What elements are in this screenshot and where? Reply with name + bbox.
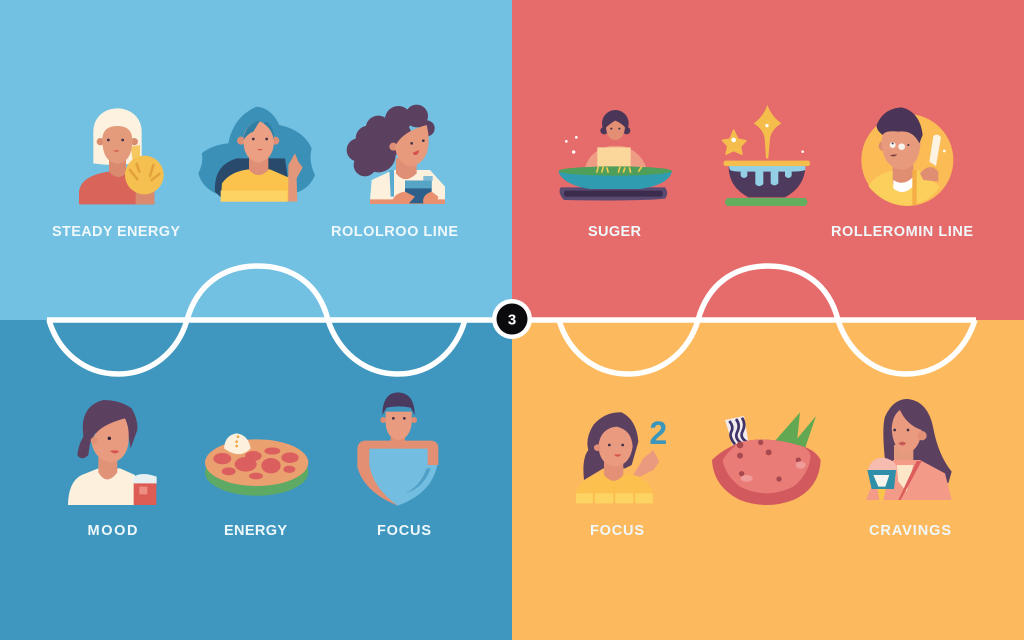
icon: pizza <box>205 433 308 496</box>
icon: man behind blue shield <box>357 392 438 506</box>
icon: woman with drink <box>68 400 157 505</box>
icon: woman with white headscarf and shell fan <box>79 108 164 204</box>
icon: woman with long blue hair <box>198 107 315 202</box>
icon: man with glasses in yellow circle <box>861 107 953 206</box>
panel: bottom left, mood energy focus <box>0 320 512 640</box>
label: focus: FOCUS <box>590 523 644 539</box>
label: energy: ENERGY <box>224 523 287 539</box>
icon: woman with windblown curly hair and cup <box>347 105 445 204</box>
icon: watermelon-like bowl with bacon and leaves <box>712 412 821 505</box>
label: mood: MOOD <box>88 523 138 539</box>
label: focus: FOCUS <box>377 523 431 539</box>
label: steady energy: STEADY ENERGY <box>52 224 180 240</box>
chart: wave lines across the centre <box>47 266 976 374</box>
icon: dark bowl with star and sparkle <box>722 105 810 206</box>
badge: number 3: 3 <box>508 312 516 328</box>
icon: person at noodle bowl <box>558 110 672 200</box>
panel: bottom right, focus and cravings <box>512 320 1024 640</box>
label: cravings: CRAVINGS <box>869 523 951 539</box>
label: suger: SUGER <box>588 224 642 240</box>
panel: top left, steady energy <box>0 0 512 320</box>
label: rololroo line: ROLOLROO LINE <box>331 224 458 240</box>
number two: 2 <box>649 415 667 451</box>
icon: woman with number two <box>576 412 667 503</box>
label: rolleromin line: ROLLEROMIN LINE <box>831 224 973 240</box>
icon: woman with long hair and dessert <box>866 399 952 500</box>
badge: number 3 <box>492 299 532 339</box>
panel: top right, sugar <box>512 0 1024 320</box>
